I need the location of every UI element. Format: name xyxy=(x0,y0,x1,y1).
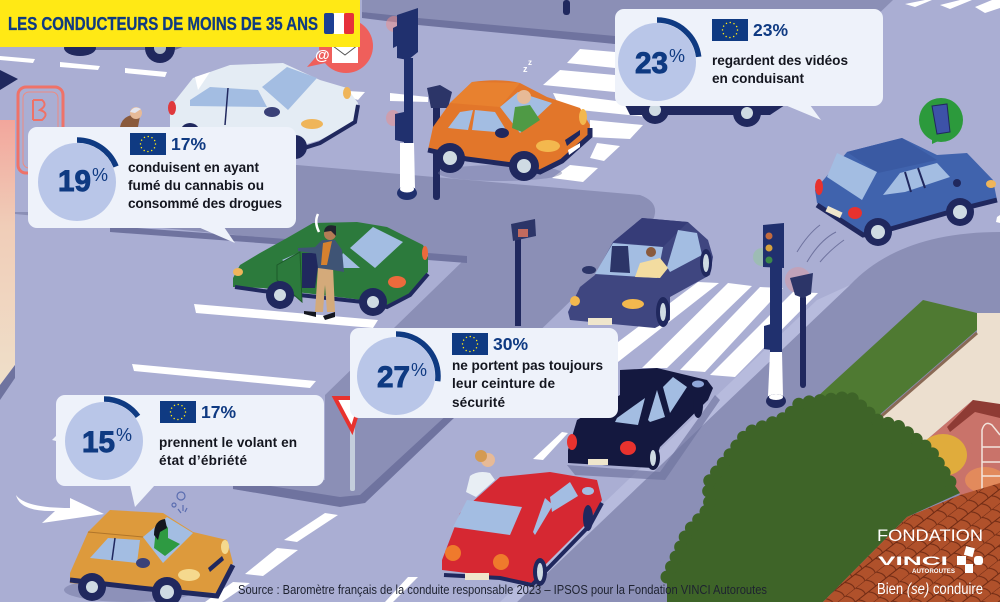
crosswalk: centre right xyxy=(618,282,818,377)
callout: seat belt xyxy=(350,328,618,418)
sidewalk: central island xyxy=(15,165,655,507)
traffic camera: centre xyxy=(511,219,536,326)
banner: title xyxy=(0,0,360,47)
blue car with skid lines xyxy=(797,138,997,262)
EU value: 30% xyxy=(493,334,528,354)
description: regardent des vidéos xyxy=(712,53,848,68)
description xyxy=(712,53,848,86)
crosswalk: top centre xyxy=(543,49,648,182)
traffic camera: right xyxy=(785,267,813,388)
donut: 23% xyxy=(615,20,699,104)
hidden dark car under top-right callout xyxy=(625,96,785,127)
logo: Fondation VINCI Autoroutes: VINCI xyxy=(878,554,948,568)
description: en conduisant xyxy=(712,71,804,86)
donut: 23%: 23 xyxy=(635,47,668,80)
donut: 27%: % xyxy=(411,360,427,380)
red car xyxy=(442,472,602,586)
description: leur ceinture de xyxy=(452,376,555,391)
icon: EU flag xyxy=(160,401,196,423)
icon: EU flag xyxy=(452,333,488,355)
logo mark xyxy=(957,546,983,573)
description: prennent le volant en xyxy=(159,435,297,450)
house xyxy=(877,313,1000,495)
traffic camera: small top xyxy=(427,85,452,200)
description: état d’ébriété xyxy=(159,453,247,468)
callout: videos xyxy=(615,9,883,120)
icon: EU flag xyxy=(712,19,748,41)
donut: 27% xyxy=(354,334,438,418)
hedge light xyxy=(817,300,977,417)
donut: 27%: 27 xyxy=(377,361,410,394)
description: conduisent en ayant xyxy=(128,160,259,175)
car top-left behind banner xyxy=(60,33,200,63)
old man behind callout xyxy=(120,107,142,127)
black car xyxy=(567,368,720,480)
drunk swirl icon xyxy=(172,492,187,513)
logo: Fondation VINCI Autoroutes xyxy=(877,526,983,598)
description xyxy=(159,435,297,468)
yellow car xyxy=(64,510,233,602)
donut: 19% xyxy=(35,140,119,224)
arrow: white road arrow xyxy=(16,495,104,523)
EU value: 23% xyxy=(753,20,788,40)
donut: 19%: % xyxy=(92,165,108,185)
description: ne portent pas toujours xyxy=(452,358,603,373)
speech bubble: email: @ xyxy=(315,47,330,64)
roof xyxy=(823,483,1000,602)
green car with driver smoking xyxy=(233,222,428,316)
person smoking xyxy=(298,214,344,320)
description xyxy=(128,160,282,211)
pole top xyxy=(563,0,570,15)
sidewalk: top centre xyxy=(362,0,893,44)
orange car: z xyxy=(523,64,528,74)
title text: LES CONDUCTEURS DE MOINS DE 35 ANS xyxy=(8,14,318,34)
description: consommé des drogues xyxy=(128,196,282,211)
donut: 23%: % xyxy=(669,46,685,66)
sidewalk: lower right xyxy=(500,232,1000,602)
white car xyxy=(168,63,365,159)
description: sécurité xyxy=(452,395,505,410)
traffic light: main top xyxy=(386,8,418,200)
EU value: 17% xyxy=(171,134,206,154)
donut: 19%: 19 xyxy=(58,165,91,198)
yield sign xyxy=(335,398,362,491)
orange car xyxy=(428,58,590,181)
donut: 15%: % xyxy=(116,425,132,445)
orange car: z xyxy=(528,58,532,67)
woman at red car xyxy=(466,450,495,497)
donut: 15%: 15 xyxy=(82,426,115,459)
speech bubble: email xyxy=(307,19,373,73)
speech bubble: phone xyxy=(919,98,963,144)
navy car xyxy=(568,218,713,328)
description: fumé du cannabis ou xyxy=(128,178,264,193)
left building xyxy=(0,70,18,400)
logo: Fondation VINCI Autoroutes: AUTOROUTES xyxy=(912,569,955,575)
EU value: 17% xyxy=(201,402,236,422)
donut: 15% xyxy=(62,399,146,483)
logo: Fondation VINCI Autoroutes: FONDATION xyxy=(877,526,983,545)
description xyxy=(452,358,603,410)
icon: EU flag xyxy=(130,133,166,155)
callout: drink driving xyxy=(52,395,324,507)
neon sign xyxy=(18,87,63,173)
icon: French flag xyxy=(324,13,354,34)
source line: Source : Baromètre français de la conduite responsable 2023 – IPSOS pour la Fondation VINCI Autoroutes xyxy=(238,583,767,597)
logo: Fondation VINCI Autoroutes: Bien (se) conduire xyxy=(877,581,983,598)
hedge dark xyxy=(667,397,960,602)
callout: cannabis and drugs xyxy=(28,127,296,243)
traffic light: right xyxy=(753,223,786,408)
